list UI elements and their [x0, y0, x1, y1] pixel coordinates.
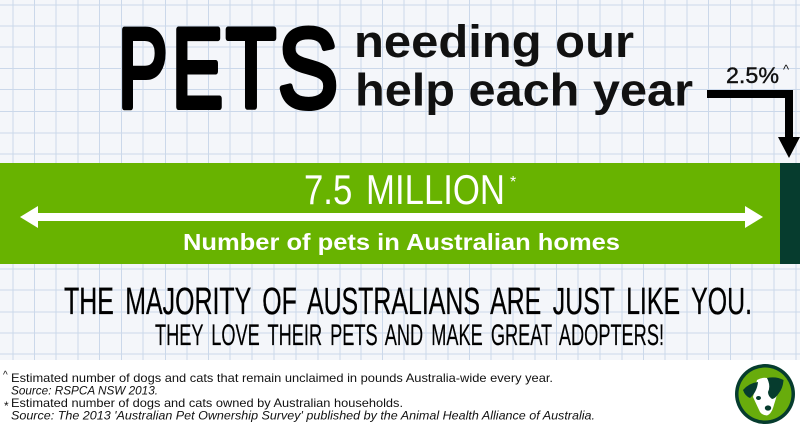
footnotes: ^: [3, 370, 8, 381]
footnotes: [3, 370, 595, 422]
label: number of pets: Number of pets in Australian homes: [183, 229, 620, 255]
heading: 7.5 million: 7.5 MILLION: [304, 166, 505, 213]
footnotes: Source: The 2013 'Australian Pet Ownership Survey' published by the Animal Health Alliance of Australia.: [11, 408, 595, 422]
title: needing our help each year: [354, 16, 693, 116]
heading: 7.5 million: *: [510, 174, 516, 191]
label: 2.5%: ^: [783, 62, 790, 77]
title: PETS: S: [278, 6, 338, 131]
bar segment: unclaimed pets: [780, 163, 800, 264]
footnotes: Estimated number of dogs and cats that remain unclaimed in pounds Australia-wide every year.: [11, 371, 553, 385]
footnotes: *: [4, 399, 9, 413]
footnotes: Source: RSPCA NSW 2013.: [11, 384, 158, 398]
arrow: black elbow pointing to dark segment: [707, 94, 800, 158]
title: PETS: E: [172, 6, 223, 131]
label: 2.5%: 2.5%: [726, 63, 779, 88]
arrow: white double-headed: [20, 206, 763, 228]
title: needing our help each year: help each year: [355, 64, 693, 116]
title: needing our help each year: needing our: [354, 16, 634, 67]
title: PETS: T: [226, 6, 276, 131]
title: PETS: [118, 6, 338, 131]
bar: pets in Australian homes: [0, 163, 800, 264]
icon: dog logo: [735, 364, 795, 424]
title: PETS: P: [118, 6, 168, 131]
footnotes: Estimated number of dogs and cats owned by Australian households.: [11, 396, 403, 410]
